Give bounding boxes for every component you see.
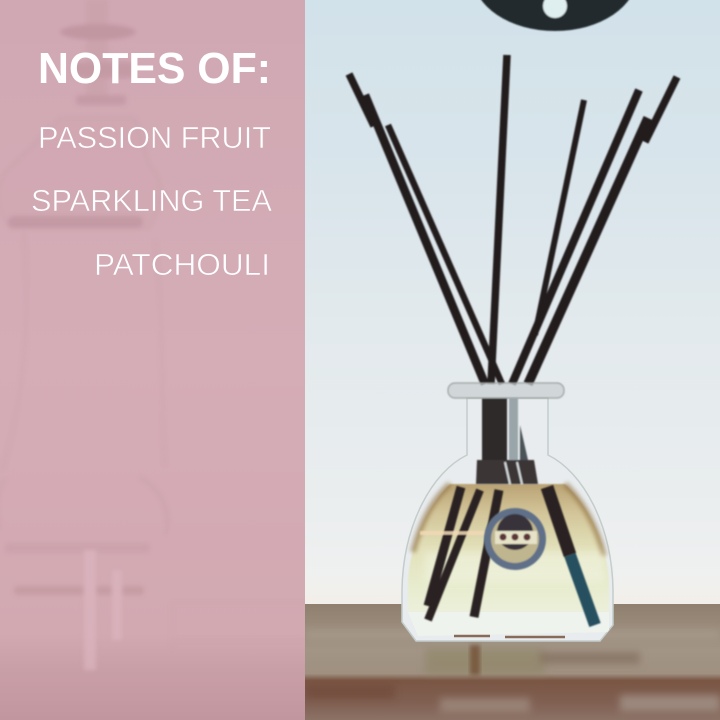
wooden table xyxy=(305,604,720,720)
text block: scent notes xyxy=(31,120,272,282)
bottle rim xyxy=(448,383,564,398)
glass base xyxy=(606,628,609,632)
sticks in neck xyxy=(476,398,538,484)
note: sparkling tea: SPARKLING TEA xyxy=(31,183,272,218)
panel: pink overlay xyxy=(0,0,305,720)
wall background xyxy=(305,0,720,610)
wall clock xyxy=(473,0,637,31)
ghost bottle silhouette xyxy=(7,22,143,670)
liquid highlight xyxy=(425,552,605,582)
note: patchouli: PATCHOULI xyxy=(94,247,270,282)
heading: notes of: NOTES OF: xyxy=(38,44,271,93)
liquid edge shading xyxy=(413,484,604,556)
highlight band across liquid xyxy=(420,531,495,535)
bottle body xyxy=(402,398,613,641)
bottle label logo xyxy=(484,508,546,570)
liquid xyxy=(408,484,609,612)
sticks in liquid xyxy=(428,487,595,625)
glass bottle xyxy=(402,383,613,641)
reed sticks above bottle xyxy=(349,55,677,384)
photo: reed diffuser on wooden table xyxy=(305,0,720,720)
note: passion fruit: PASSION FRUIT xyxy=(38,120,271,155)
